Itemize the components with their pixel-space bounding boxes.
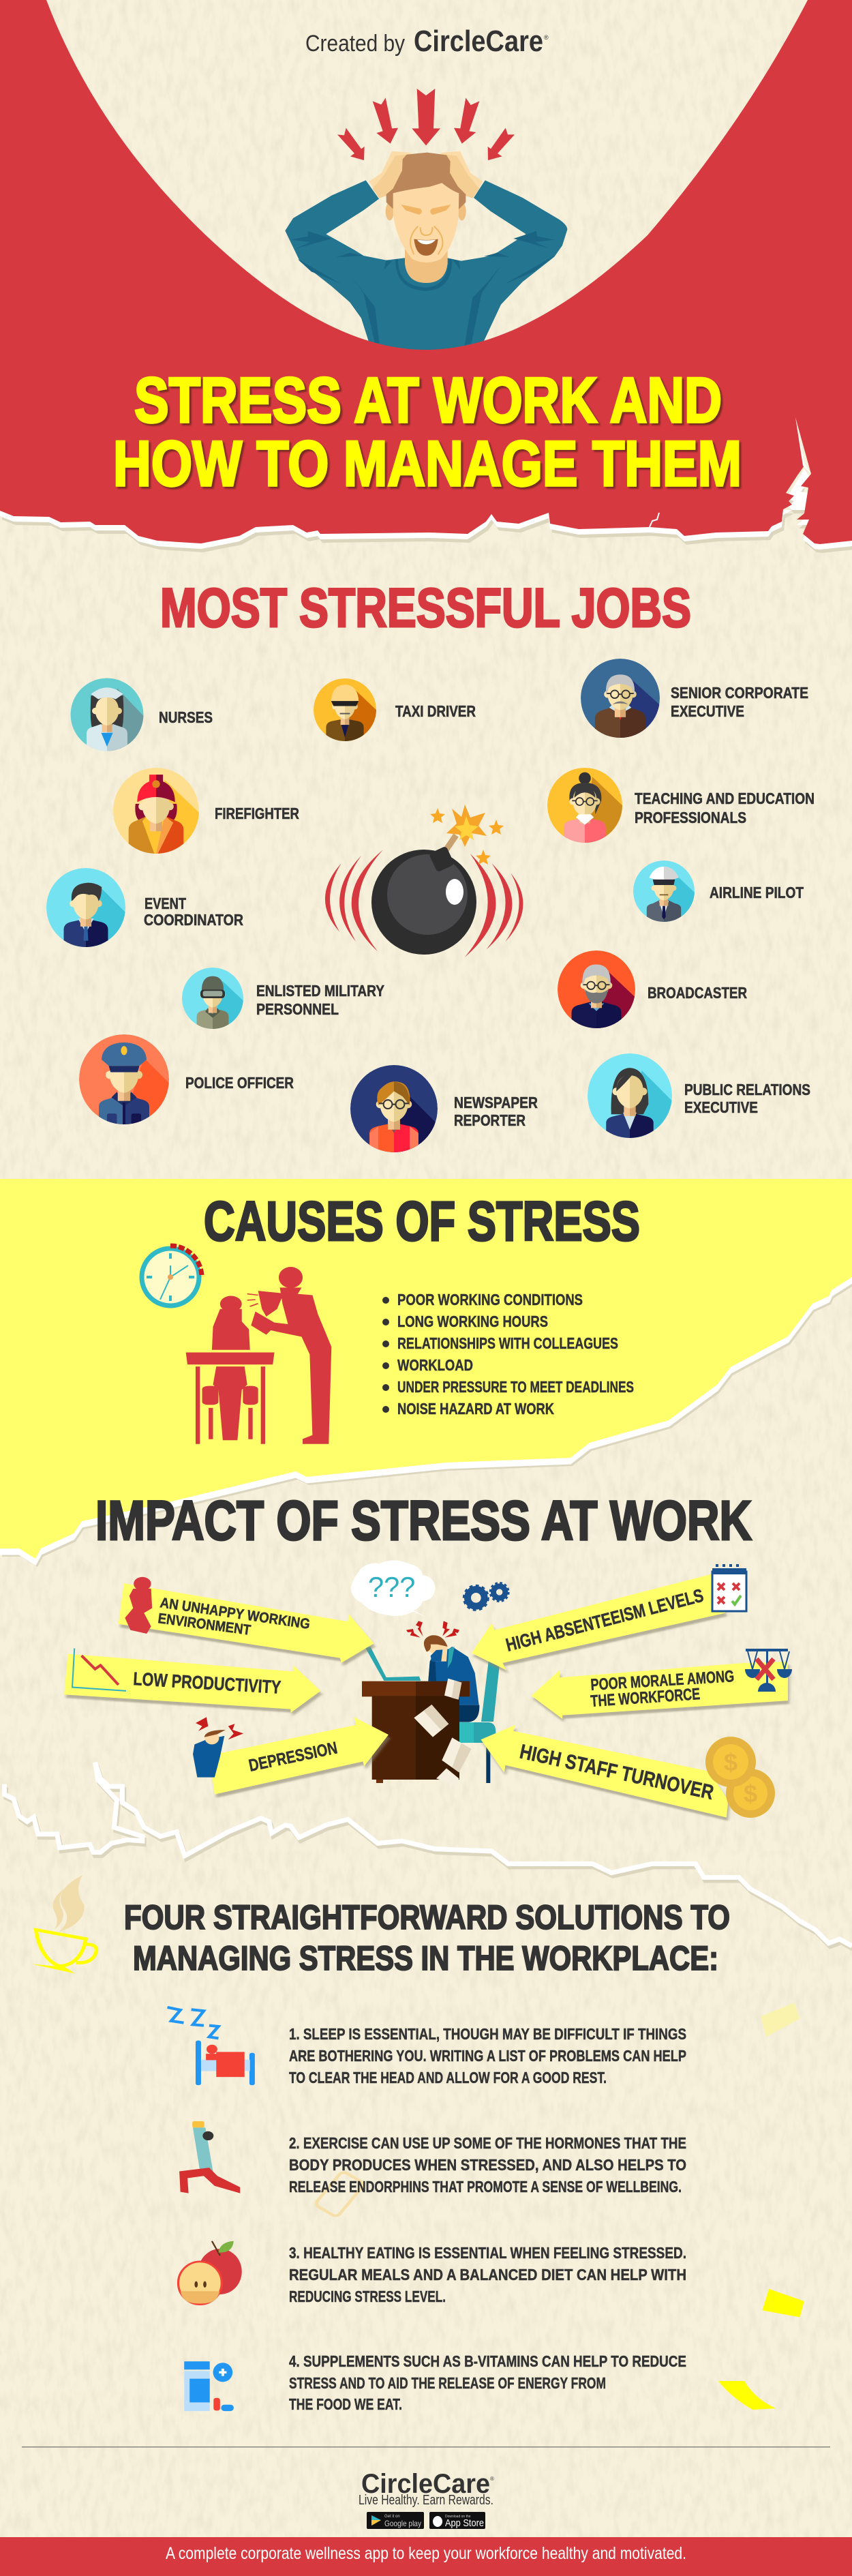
icon: coffee cup <box>31 1875 97 1973</box>
job: police officer: POLICE OFFICER <box>185 1074 294 1092</box>
job: senior corporate executive <box>581 659 808 739</box>
flying papers <box>414 1705 448 1737</box>
gears <box>464 1583 508 1610</box>
job: enlisted military personnel: PERSONNEL <box>256 1000 339 1018</box>
job: firefighter <box>113 768 299 856</box>
badge: app store: Download on the <box>445 2515 471 2519</box>
arrow: an unhappy working environment: ENVIRONMENT <box>157 1611 252 1638</box>
job: taxi driver: TAXI DRIVER <box>395 702 476 720</box>
arrow: high staff turnover: HIGH STAFF TURNOVER <box>518 1741 716 1804</box>
hands <box>369 151 412 198</box>
job: enlisted military personnel <box>182 968 384 1030</box>
job: police officer <box>79 1034 294 1126</box>
arrow: poor morale among the workforce: THE WORKFORCE <box>590 1685 701 1711</box>
icon: supplements <box>184 2361 234 2411</box>
badge: google play: Google play <box>384 2519 421 2528</box>
list: causes: LONG WORKING HOURS <box>397 1313 548 1330</box>
icon: coins: $ <box>744 1780 757 1808</box>
job: airline pilot: AIRLINE PILOT <box>710 884 804 901</box>
footer logo: ® <box>490 2476 494 2482</box>
list: causes <box>382 1291 634 1418</box>
job: teaching and education: PROFESSIONALS <box>635 809 746 826</box>
icon: sleep <box>168 2007 255 2085</box>
arrow: high staff turnover <box>481 1725 775 1818</box>
job: broadcaster: BROADCASTER <box>648 984 747 1002</box>
text: exercise: RELEASE ENDORPHINS THAT PROMOTE A SENSE OF WELLBEING. <box>289 2178 682 2196</box>
text: supplements: 4. SUPPLEMENTS SUCH AS B-VITAMINS CAN HELP TO REDUCE <box>289 2352 686 2370</box>
text: sleep <box>289 2025 686 2086</box>
credit line: ® <box>544 34 549 41</box>
job: newspaper reporter <box>350 1065 538 1154</box>
stress bolts <box>406 1621 459 1638</box>
job: newspaper reporter: REPORTER <box>454 1111 526 1129</box>
speech bubble <box>351 1560 435 1618</box>
text: supplements: THE FOOD WE EAT. <box>289 2395 402 2413</box>
illustration: stressed worker at desk: ??? <box>368 1572 415 1603</box>
desk <box>362 1681 416 1696</box>
badge: app store: App Store <box>445 2517 484 2529</box>
heading: most stressful jobs: MOST STRESSFUL JOBS <box>160 578 691 639</box>
arrow: poor morale among the workforce: POOR MORALE AMONG <box>590 1667 735 1694</box>
job: taxi driver <box>314 678 476 743</box>
arrow: high absenteeism levels <box>472 1564 746 1671</box>
list: causes: POOR WORKING CONDITIONS <box>397 1291 583 1308</box>
text: healthy eating: REDUCING STRESS LEVEL. <box>289 2288 446 2305</box>
job: teaching and education: TEACHING AND EDUCATION <box>635 790 815 807</box>
icon: calendar <box>712 1564 746 1611</box>
icon: scales <box>745 1649 792 1692</box>
icon: wall clock <box>142 1246 202 1306</box>
job: newspaper reporter: NEWSPAPER <box>454 1094 538 1111</box>
job: public relations executive <box>588 1053 810 1139</box>
text: healthy eating: REGULAR MEALS AND A BALANCED DIET CAN HELP WITH <box>289 2266 686 2283</box>
illustration: boss shouting through megaphone at worker <box>186 1267 331 1444</box>
arrow: high absenteeism levels: HIGH ABSENTEEISM LEVELS <box>504 1585 705 1656</box>
footer bar: A complete corporate wellness app to keep your workforce healthy and motivated. <box>166 2544 686 2563</box>
job: airline pilot <box>633 860 804 923</box>
job: senior corporate executive: SENIOR CORPORATE <box>671 684 808 702</box>
head <box>386 203 394 220</box>
text: sleep: ARE BOTHERING YOU. WRITING A LIST OF PROBLEMS CAN HELP <box>289 2047 686 2065</box>
job: nurses <box>71 678 213 753</box>
heading: four straightforward solutions: MANAGING STRESS IN THE WORKPLACE: <box>133 1939 718 1977</box>
icon: exercise <box>179 2121 240 2193</box>
job: senior corporate executive: EXECUTIVE <box>671 702 744 720</box>
job: firefighter: FIREFIGHTER <box>215 805 299 822</box>
arrow: low productivity <box>64 1648 320 1713</box>
text: sleep: TO CLEAR THE HEAD AND ALLOW FOR A GOOD REST. <box>289 2069 607 2086</box>
credit line: CircleCare <box>414 25 543 58</box>
job: event coordinator: COORDINATOR <box>144 911 243 929</box>
job: public relations executive: PUBLIC RELATIONS <box>684 1081 810 1098</box>
icon: apple <box>178 2241 242 2305</box>
list: causes: NOISE HAZARD AT WORK <box>397 1400 554 1418</box>
arrows pointing at head <box>337 89 515 160</box>
red header shape with torn edge <box>0 0 852 553</box>
job: event coordinator <box>46 868 243 948</box>
title: STRESS AT WORK AND <box>134 364 722 436</box>
text: supplements <box>289 2352 686 2413</box>
heading: four straightforward solutions: FOUR STRAIGHTFORWARD SOLUTIONS TO <box>124 1898 730 1936</box>
decorative scraps and cup: solutions section <box>31 1875 804 2410</box>
arrow: an unhappy working environment <box>119 1577 374 1663</box>
list: causes: UNDER PRESSURE TO MEET DEADLINES <box>397 1378 634 1396</box>
icon: ticking bomb <box>325 805 523 957</box>
illustration: stressed worker at desk <box>351 1560 508 1785</box>
heading: four straightforward solutions <box>124 1898 730 1977</box>
job: broadcaster <box>558 950 747 1030</box>
credit line: Created by <box>305 31 405 57</box>
badge: google play: Get it on <box>384 2515 400 2519</box>
footer logo: Live Healthy. Earn Rewards. <box>359 2493 493 2508</box>
arrow: low productivity: LOW PRODUCTIVITY <box>133 1668 282 1698</box>
icon: distressed woman <box>125 1577 152 1634</box>
icon: depressed man <box>193 1717 243 1778</box>
title <box>113 364 742 499</box>
chair <box>481 1662 500 1722</box>
job: public relations executive: EXECUTIVE <box>684 1098 758 1116</box>
panel: causes of stress background <box>0 1179 852 1567</box>
list: causes: WORKLOAD <box>397 1356 473 1374</box>
laptop <box>365 1647 421 1681</box>
credit line <box>305 25 549 58</box>
text: exercise: 2. EXERCISE CAN USE UP SOME OF THE HORMONES THAT THE <box>289 2134 686 2152</box>
text: healthy eating <box>289 2244 686 2305</box>
text: healthy eating: 3. HEALTHY EATING IS ESSENTIAL WHEN FEELING STRESSED. <box>289 2244 686 2262</box>
icon: coins <box>705 1737 775 1818</box>
arrow: depression: DEPRESSION <box>247 1738 339 1776</box>
icon: coins: $ <box>724 1748 737 1776</box>
arrow: an unhappy working environment: AN UNHAPPY WORKING <box>159 1595 311 1632</box>
jumper <box>285 180 567 357</box>
arrow: depression <box>193 1717 389 1795</box>
footer bar <box>0 2537 852 2576</box>
badge: google play <box>367 2512 424 2529</box>
arrow: poor morale among the workforce <box>532 1649 792 1719</box>
list: causes: RELATIONSHIPS WITH COLLEAGUES <box>397 1334 618 1352</box>
heading: causes of stress: CAUSES OF STRESS <box>204 1190 640 1253</box>
text: supplements: STRESS AND TO AID THE RELEASE OF ENERGY FROM <box>289 2374 606 2392</box>
footer logo: CircleCare <box>361 2469 490 2499</box>
badge: app store <box>429 2512 485 2529</box>
text: exercise <box>289 2134 686 2196</box>
job: event coordinator: EVENT <box>144 895 186 912</box>
person <box>459 1705 479 1722</box>
icon: falling chart <box>72 1648 126 1691</box>
text: sleep: 1. SLEEP IS ESSENTIAL, THOUGH MAY BE DIFFICULT IF THINGS <box>289 2025 686 2043</box>
text: exercise: BODY PRODUCES WHEN STRESSED, AND ALSO HELPS TO <box>289 2156 686 2174</box>
job: nurses: NURSES <box>159 708 213 726</box>
job: teaching and education <box>547 768 815 844</box>
job: enlisted military personnel: ENLISTED MILITARY <box>256 982 384 1000</box>
illustration: stressed man <box>285 89 567 357</box>
torn paper outline <box>4 1763 852 1949</box>
